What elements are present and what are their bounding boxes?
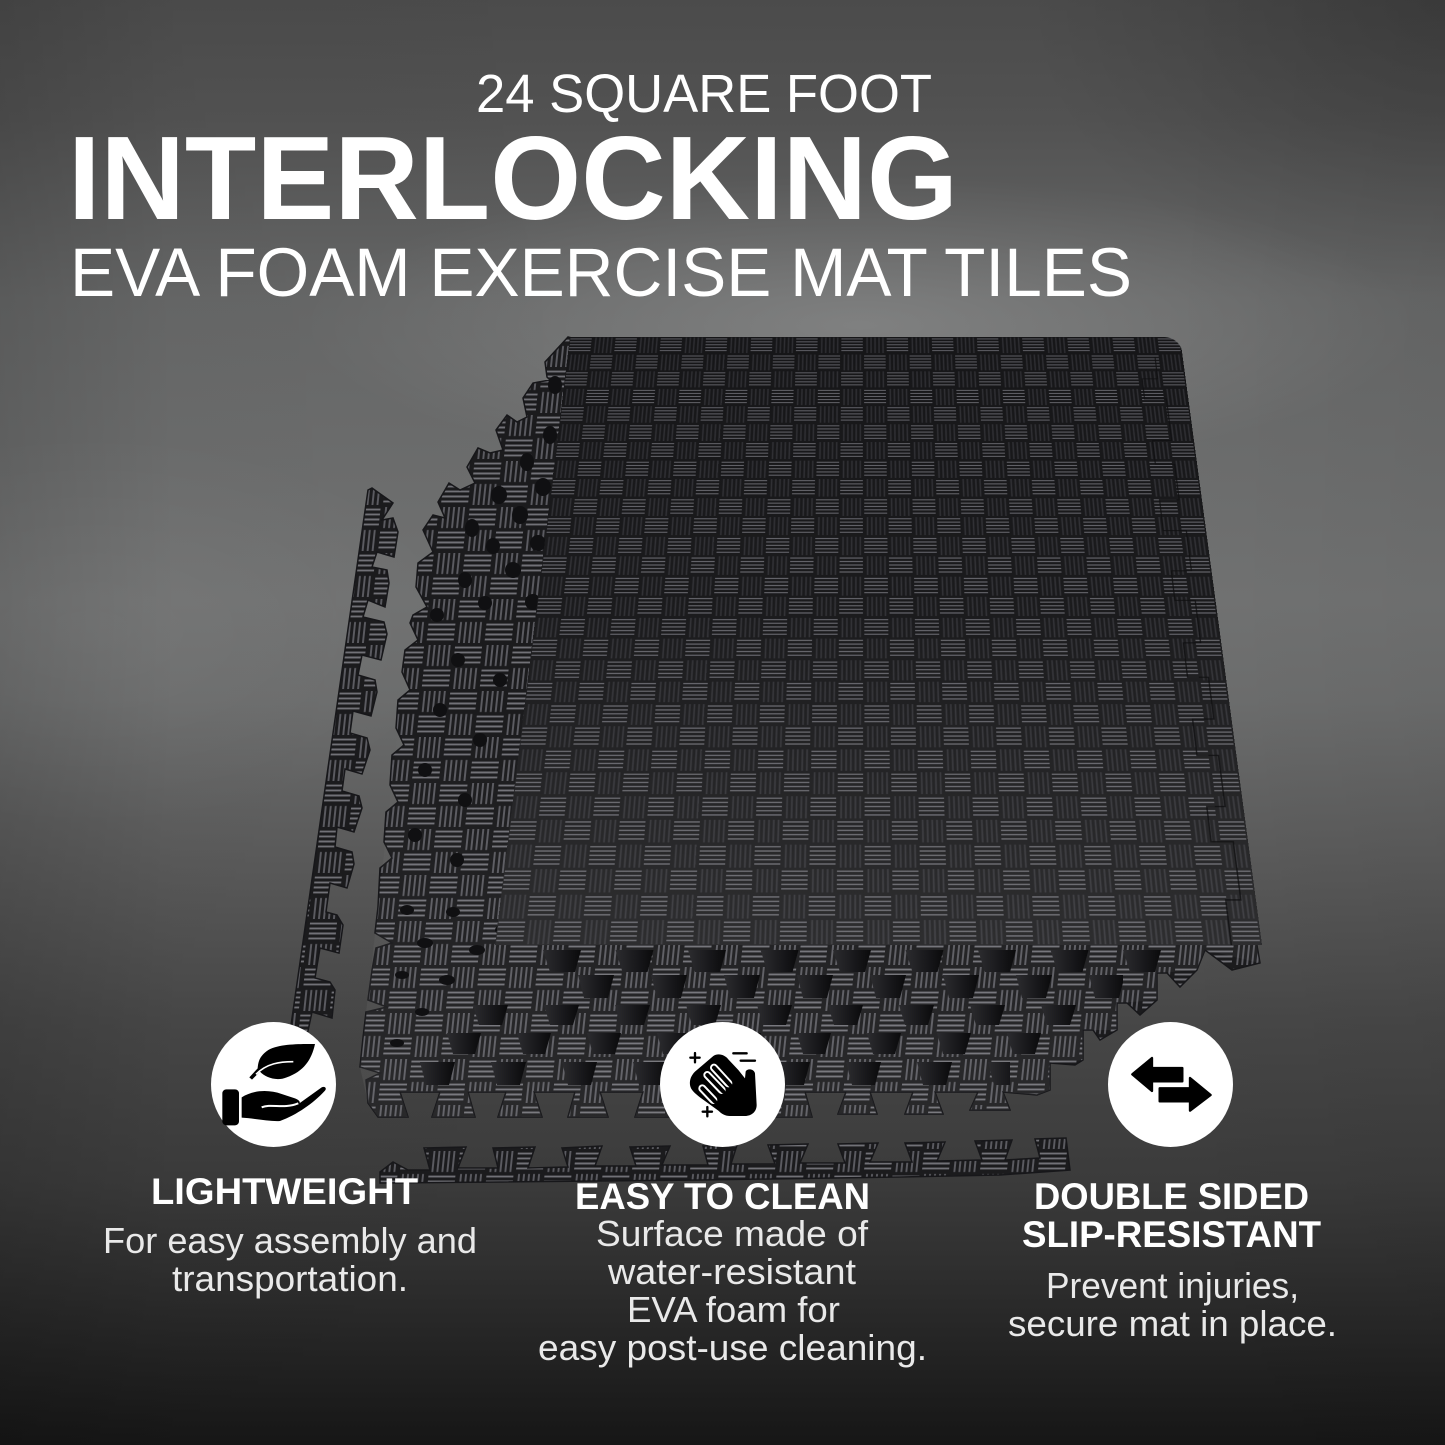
body: easy to clean: water-resistant xyxy=(607,1251,856,1292)
feature: lightweight xyxy=(103,1022,477,1299)
icon: hands washing xyxy=(660,1022,785,1147)
main top mat with checkerboard ribs xyxy=(495,337,1262,945)
left loose border strip xyxy=(286,488,398,1060)
icon: opposing arrows xyxy=(1108,1022,1233,1147)
title line: EVA foam exercise mat tiles: EVA FOAM EXERCISE MAT TILES xyxy=(70,234,1132,311)
body: lightweight: For easy assembly and xyxy=(103,1220,477,1261)
body: lightweight: transportation. xyxy=(172,1258,408,1299)
bottom loose border strip xyxy=(380,1138,1070,1183)
body: lightweight xyxy=(103,1220,477,1299)
title line: 24 square foot: 24 SQUARE FOOT xyxy=(476,64,932,124)
heading: double sided slip-resistant: SLIP-RESISTANT xyxy=(1022,1214,1321,1255)
feature: easy to clean xyxy=(538,1022,927,1368)
body: easy to clean xyxy=(538,1213,927,1368)
heading: double sided slip-resistant xyxy=(1022,1176,1321,1255)
stacked mat layers silhouette xyxy=(360,337,1260,1117)
dark notch rows xyxy=(420,950,1163,1085)
title line: interlocking: INTERLOCKING xyxy=(68,112,958,245)
body: easy to clean: Surface made of xyxy=(596,1213,869,1254)
body: easy to clean: easy post-use cleaning. xyxy=(538,1327,927,1368)
heading: lightweight: LIGHTWEIGHT xyxy=(151,1171,418,1212)
body: double sided: Prevent injuries, xyxy=(1046,1265,1299,1306)
body: easy to clean: EVA foam for xyxy=(627,1289,840,1330)
heading: easy to clean: EASY TO CLEAN xyxy=(575,1176,870,1217)
body: double sided xyxy=(1008,1265,1337,1344)
icon: hand holding leaf xyxy=(211,1022,336,1147)
dark peg holes on the left stack edge xyxy=(390,376,562,1047)
title xyxy=(68,64,1132,311)
heading: double sided slip-resistant: DOUBLE SIDED xyxy=(1034,1176,1309,1217)
body: double sided: secure mat in place. xyxy=(1008,1303,1337,1344)
feature: double sided slip-resistant xyxy=(1008,1022,1337,1344)
